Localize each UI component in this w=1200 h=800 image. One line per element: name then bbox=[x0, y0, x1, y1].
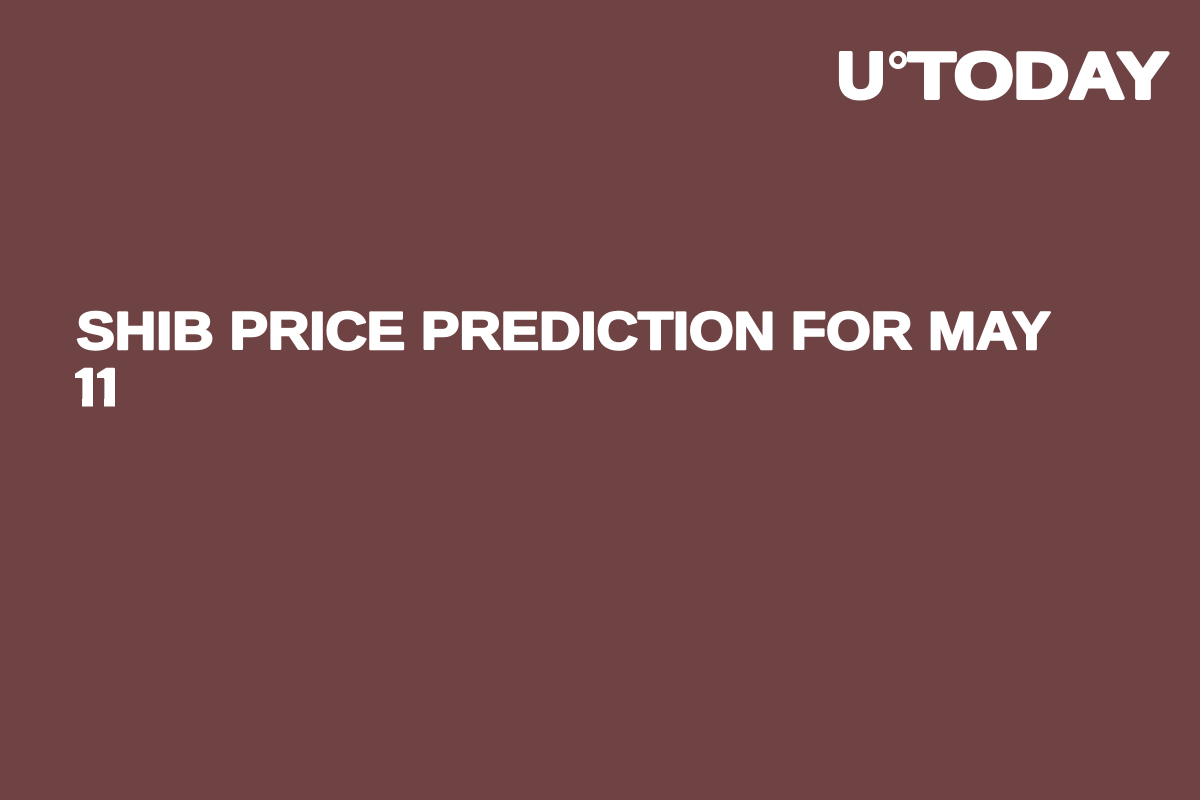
title line 2: 11 bbox=[72, 359, 123, 418]
logo: U.Today bbox=[837, 39, 1168, 112]
title bbox=[75, 310, 1051, 406]
logo degree ring bbox=[891, 53, 905, 67]
logo letter U: U bbox=[837, 39, 885, 112]
logo word TODAY: TODAY bbox=[908, 39, 1168, 112]
title line 1: SHIB PRICE PREDICTION FOR MAY bbox=[76, 302, 1050, 361]
